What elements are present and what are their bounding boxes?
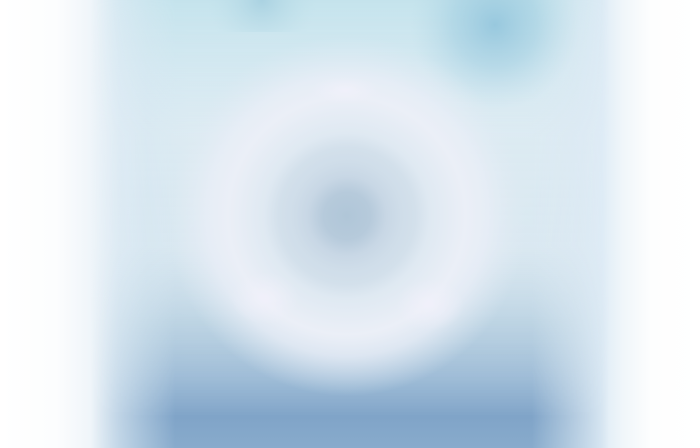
wheel lower right highlight	[396, 279, 464, 331]
wheel top highlight	[311, 76, 379, 104]
circular wheel with hub	[167, 36, 527, 396]
top right blue area	[410, 0, 580, 110]
vertical tint of screen, cyan top to steel blue bottom	[98, 0, 602, 448]
wheel lower left highlight	[231, 272, 299, 324]
top left blue accent	[207, 0, 317, 32]
